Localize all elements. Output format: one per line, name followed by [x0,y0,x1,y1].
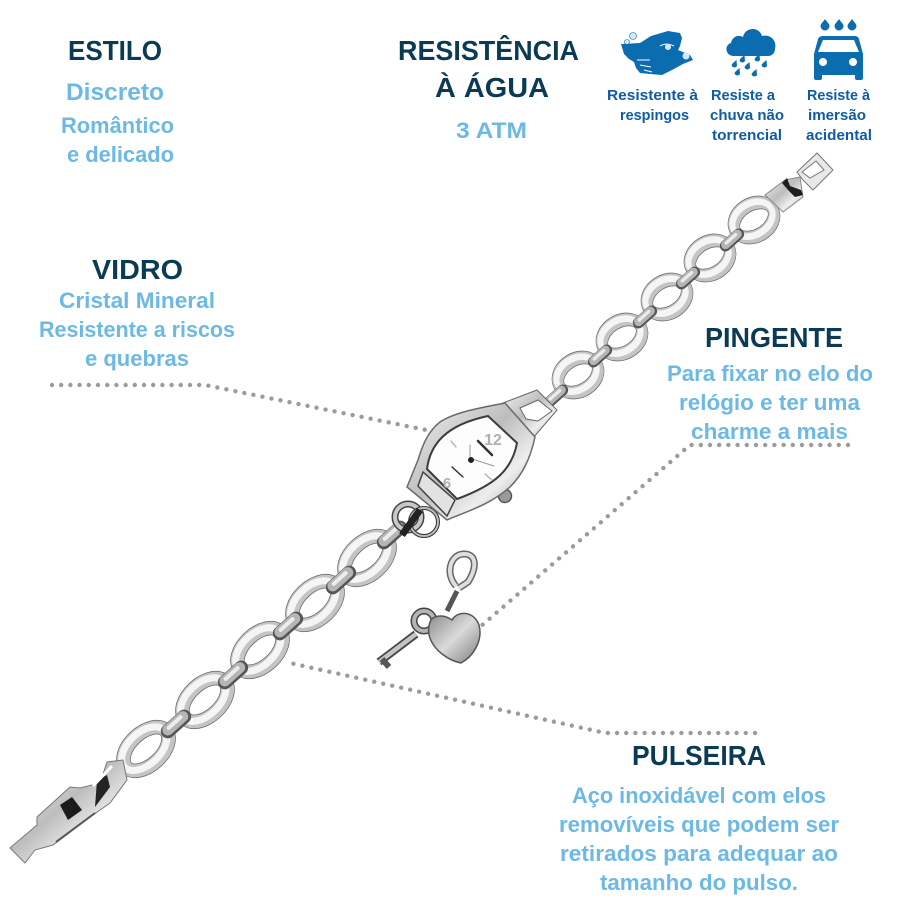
watch: numeral 12: 12 [484,432,502,449]
caption: respingos [607,87,699,124]
watch: numeral 6: 6 [443,475,451,492]
icon: rain cloud [726,29,775,76]
caption: imersão: Resiste à [807,87,871,104]
bracelet: upper clasp [765,153,833,212]
bracelet: lower chain [114,526,400,780]
watch: brand marks and hands [451,441,494,480]
icon captions [607,87,872,144]
caption: chuva: torrencial [712,127,782,144]
panel: resistência à água [398,35,579,143]
heading: pingente: PINGENTE [705,322,843,353]
caption: respingos: Resistente à [607,87,699,104]
watch: lower ring [395,504,438,536]
heading: resistência: RESISTÊNCIA [398,35,579,66]
dotted leader: vidro [52,385,436,432]
text: pulseira description [559,783,839,895]
text: romântico: Romântico [61,113,174,138]
text: pulseira description: removíveis que podem ser [559,812,839,837]
text: 3 atm: 3 ATM [456,118,527,143]
dotted leader: pingente [480,445,848,627]
bracelet: lower clasp [10,760,127,863]
heading: vidro: VIDRO [92,254,183,285]
bracelet: upper chain [548,194,781,402]
text: pulseira description: retirados para adequar ao [560,841,838,866]
watch: upper lug [503,390,557,438]
heading: estilo: ESTILO [68,35,162,66]
caption: chuva [710,87,784,144]
text: pingente description: relógio e ter uma [679,390,861,415]
caption: imersão: imersão [808,107,866,124]
watch: crown [498,490,512,502]
text: vidro description: e quebras [85,346,189,371]
watch: dial [427,416,517,499]
watch: case [407,403,535,520]
heading: à água: À ÁGUA [435,72,549,103]
panel: estilo [61,35,174,167]
charm: heart [429,613,480,663]
text: e delicado: e delicado [67,142,174,167]
text: pingente description: Para fixar no elo do [667,361,873,386]
charm: lobster clasp [447,554,474,611]
text: pingente description [667,361,873,444]
watch [395,390,557,536]
panel: pulseira [559,740,839,895]
caption: chuva: chuva não [710,107,784,124]
charm: key [379,611,434,667]
text: vidro description [39,288,235,371]
watch: lower lug shine [418,472,455,516]
caption: chuva: Resiste a [711,87,776,104]
icon: car under drops [814,19,863,80]
panel: pingente [667,322,873,444]
caption: imersão [806,87,872,144]
caption: respingos: respingos [620,107,689,124]
panel: vidro [39,254,235,371]
caption: imersão: acidental [806,127,872,144]
text: pulseira description: Aço inoxidável com elos [572,783,826,808]
dotted leader: pulseira [290,663,755,733]
text: discreto: Discreto [66,79,164,106]
text: vidro description: Cristal Mineral [59,288,215,313]
text: pulseira description: tamanho do pulso. [600,870,798,895]
heading: pulseira: PULSEIRA [632,740,766,771]
text: pingente description: charme a mais [691,419,848,444]
text: vidro description: Resistente a riscos [39,317,235,342]
icon: hands with splashes [621,31,693,75]
